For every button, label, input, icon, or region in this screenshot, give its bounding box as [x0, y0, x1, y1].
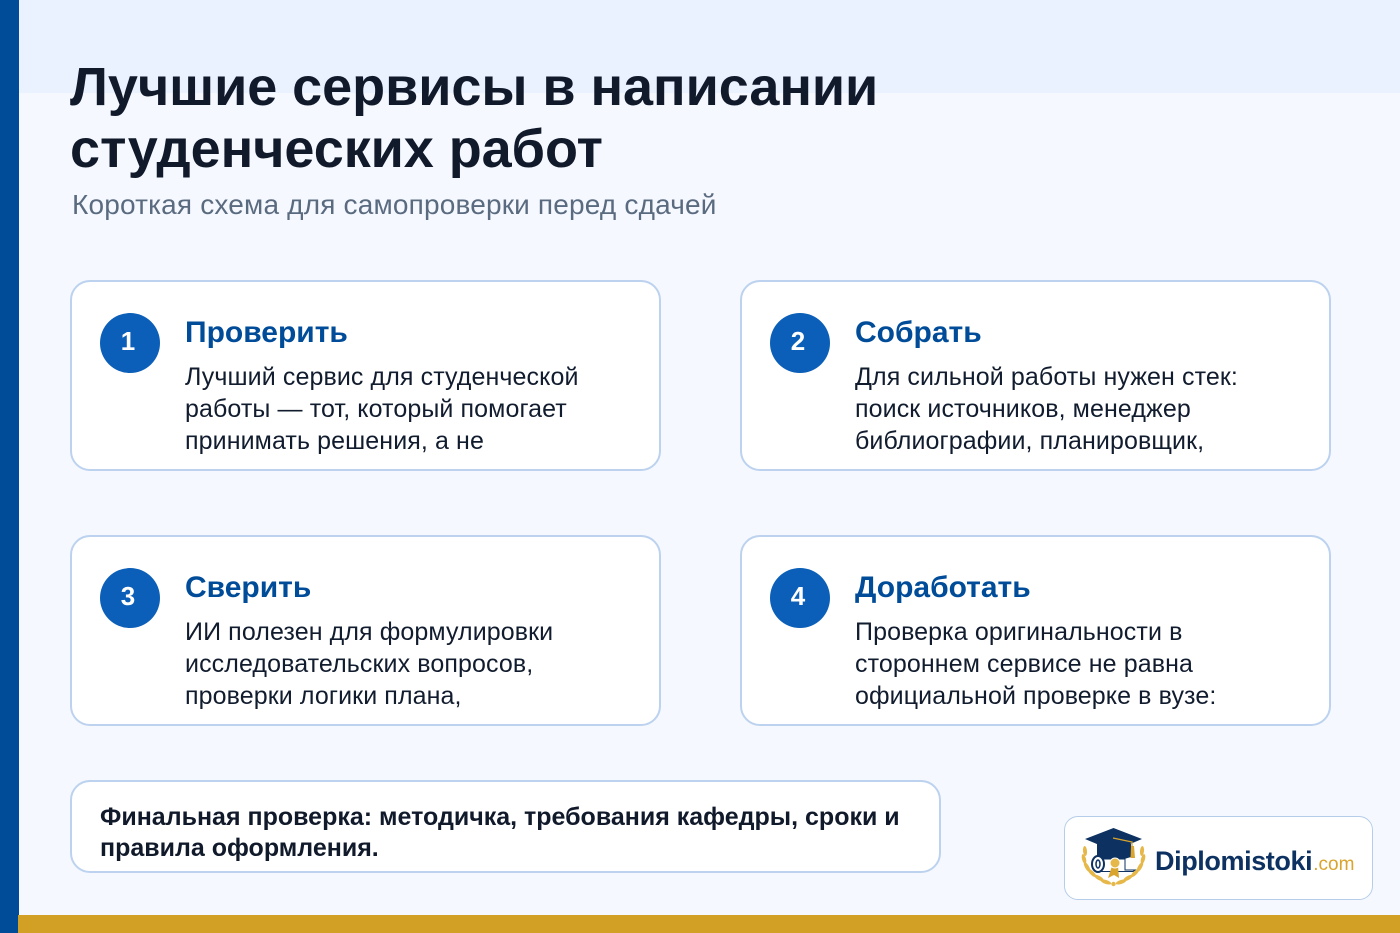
text: step 1	[185, 363, 579, 455]
title	[70, 57, 878, 179]
icon: graduation cap with laurel	[1082, 828, 1146, 886]
text: step 1: Лучший сервис для студенческой	[185, 363, 579, 391]
final check text	[100, 803, 900, 862]
panel: step 4	[740, 535, 1331, 726]
text: step 3	[185, 618, 553, 710]
step number 4: 4	[791, 581, 805, 611]
step number 2: 2	[791, 326, 805, 356]
step number 1	[100, 313, 160, 373]
bottom gold bar	[18, 915, 1400, 933]
final check text: Финальная проверка: методичка, требования кафедры, сроки и	[100, 803, 900, 831]
step number 4	[770, 568, 830, 628]
left accent bar	[0, 0, 19, 933]
final check text: правила оформления.	[100, 834, 379, 862]
heading: step 1: Проверить	[185, 316, 348, 349]
text: step 1: принимать решения, а не	[185, 427, 484, 455]
text: step 2	[855, 363, 1238, 455]
text: step 3: исследовательских вопросов,	[185, 650, 533, 678]
text: step 4: стороннем сервисе не равна	[855, 650, 1193, 678]
text: step 4: официальной проверке в вузе:	[855, 682, 1216, 710]
text: step 3: ИИ полезен для формулировки	[185, 618, 553, 646]
text: step 3: проверки логики плана,	[185, 682, 462, 710]
title: студенческих работ	[70, 119, 603, 179]
logo wordmark: Diplomistoki.com	[1155, 846, 1354, 876]
title: Лучшие сервисы в написании	[70, 57, 878, 117]
text: step 2: Для сильной работы нужен стек:	[855, 363, 1238, 391]
step number 3	[100, 568, 160, 628]
subtitle: Короткая схема для самопроверки перед сдачей	[72, 189, 717, 220]
text: step 4	[855, 618, 1216, 710]
logo card	[1064, 816, 1373, 900]
panel: step 1	[70, 280, 661, 471]
text: step 1: работы — тот, который помогает	[185, 395, 567, 423]
text: step 2: поиск источников, менеджер	[855, 395, 1191, 423]
panel: step 2	[740, 280, 1331, 471]
panel: step 3	[70, 535, 661, 726]
text: step 2: библиографии, планировщик,	[855, 427, 1204, 455]
step number 1: 1	[121, 326, 135, 356]
heading: step 2: Собрать	[855, 316, 982, 349]
text: step 4: Проверка оригинальности в	[855, 618, 1182, 646]
heading: step 4: Доработать	[855, 571, 1031, 604]
top band	[19, 0, 1400, 93]
panel: final check	[70, 780, 941, 873]
step number 2	[770, 313, 830, 373]
step number 3: 3	[121, 581, 135, 611]
heading: step 3: Сверить	[185, 571, 311, 604]
